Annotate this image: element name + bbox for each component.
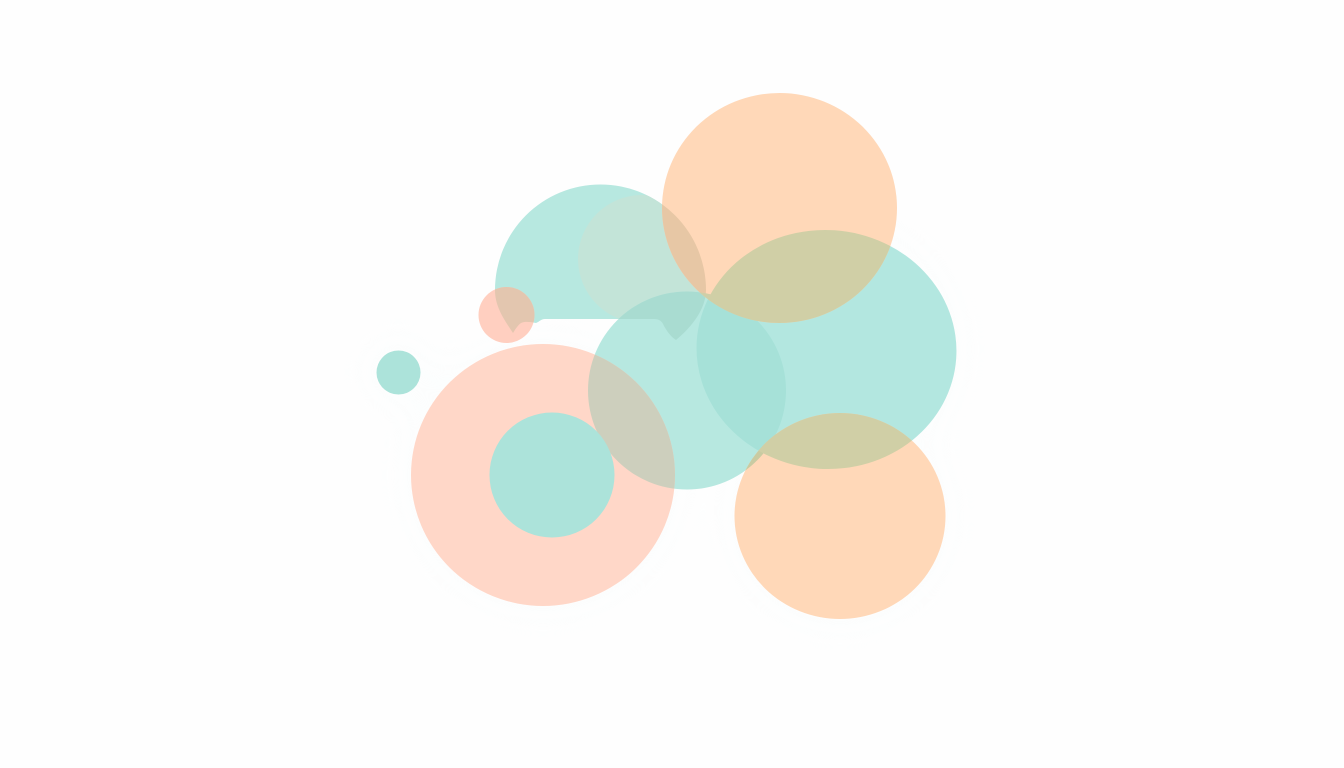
overlap of bubble and middle circle [619, 292, 705, 340]
circle: large teal right [696, 246, 956, 450]
speech bubble shape: teal [495, 184, 700, 323]
overlapping circles composition [376, 93, 956, 619]
overlap of large teal and middle circle [696, 300, 786, 450]
circle: small teal [376, 350, 420, 394]
circle: middle teal [594, 292, 758, 490]
circle: small salmon [478, 287, 534, 343]
overlap of bottom peach with teal shapes [746, 413, 912, 470]
overlap of salmon with middle circle [588, 354, 675, 488]
inner circle of speech bubble [578, 195, 706, 323]
overlap of small salmon with bubble [495, 287, 534, 333]
circle: inner teal [490, 412, 614, 538]
circle: top peach [662, 93, 897, 323]
soft halo behind circles [358, 207, 968, 634]
circle: large salmon [411, 344, 675, 606]
circle: bottom peach [734, 413, 946, 619]
overlap of top peach with teal shapes [662, 204, 890, 323]
